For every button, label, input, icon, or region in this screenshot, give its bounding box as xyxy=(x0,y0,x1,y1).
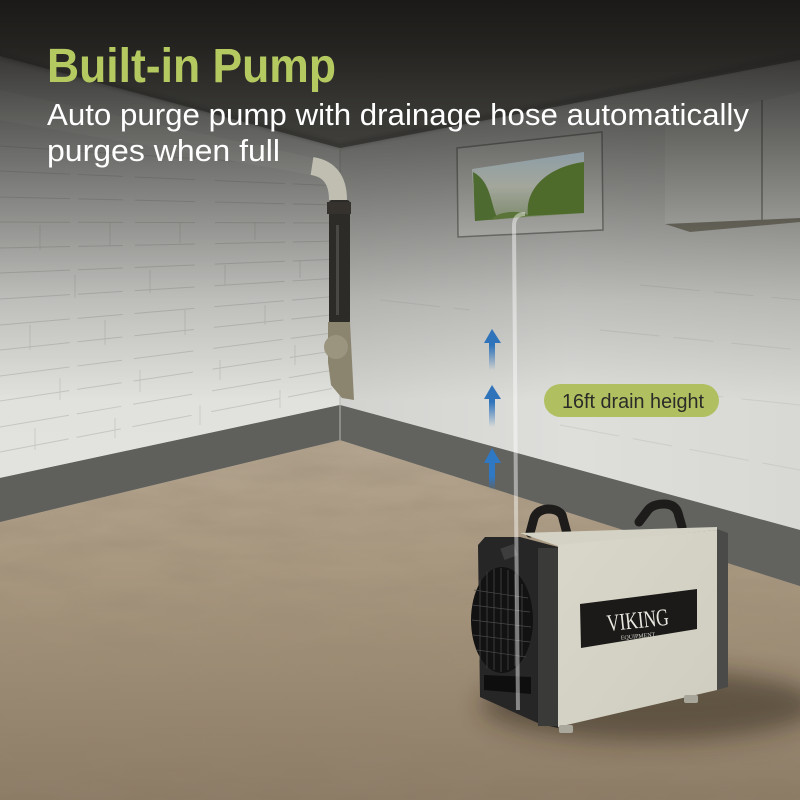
floor shadow under unit xyxy=(480,669,800,741)
drain pipe xyxy=(312,166,354,400)
ceiling xyxy=(0,0,800,148)
side panel xyxy=(558,530,717,727)
arrow: upward flow top xyxy=(484,329,501,370)
ceiling edge shadow xyxy=(0,56,800,146)
description: Auto purge pump with drainage hose automatically xyxy=(47,97,749,132)
fan grill xyxy=(471,567,533,673)
wall cabinets xyxy=(665,92,800,232)
window frame xyxy=(457,132,603,237)
dark top gradient overlay xyxy=(0,0,800,400)
window view xyxy=(472,152,584,221)
callout: drain height: 16ft drain height xyxy=(562,391,704,413)
control panel xyxy=(500,544,518,560)
top panel xyxy=(520,527,717,546)
arrow: upward flow middle xyxy=(484,385,501,427)
back panel xyxy=(717,529,728,690)
feet xyxy=(559,725,573,733)
arrow: upward flow bottom xyxy=(484,448,501,489)
right wall xyxy=(340,60,800,530)
baseboard left xyxy=(0,405,340,522)
baseboard right xyxy=(340,405,800,586)
wall corner xyxy=(339,150,341,440)
dehumidifier xyxy=(471,504,728,733)
handles xyxy=(530,504,682,537)
front black face xyxy=(478,537,558,728)
logo plate: EQUIPMENT xyxy=(621,632,656,642)
logo plate xyxy=(580,589,697,648)
callout: drain height xyxy=(544,384,719,417)
lower vent xyxy=(484,675,531,694)
drainage hose xyxy=(514,214,525,710)
floor xyxy=(0,437,800,800)
left brick wall xyxy=(0,56,340,478)
description: purges when full xyxy=(47,133,280,168)
logo plate: VIKING xyxy=(606,605,670,637)
wall pipe run xyxy=(0,90,314,175)
title: Built-in Pump xyxy=(47,40,336,93)
